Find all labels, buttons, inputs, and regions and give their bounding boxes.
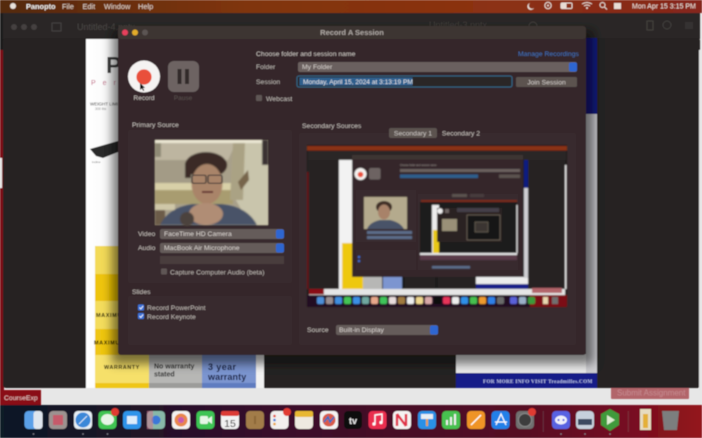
- record button: [128, 60, 160, 102]
- preview inner dialog: [352, 155, 523, 277]
- dialog shadow: [112, 30, 594, 364]
- primary source panel: FaceTime HD Camera: [164, 231, 232, 238]
- CourseExp tab: [0, 390, 41, 405]
- status icons: [527, 2, 621, 10]
- dock background: [0, 405, 702, 438]
- session form: [256, 51, 579, 103]
- right slide: blue and grey edge strip: [456, 38, 597, 374]
- slides panel: Slides: [132, 289, 151, 296]
- slide: yellow comparison table: 3 year: [208, 362, 237, 372]
- preview dock icons: [317, 297, 558, 304]
- slide: yellow comparison table: No warranty: [154, 364, 195, 370]
- background app window: toolbar: [3, 13, 700, 39]
- apple logo: [10, 3, 16, 9]
- slide: white page with heading: WEIGHT LIMIT: [90, 102, 121, 106]
- right dark side panel: [597, 38, 700, 388]
- menu bar: File: [62, 2, 74, 11]
- slide: yellow comparison table: MAXIMUM: [96, 313, 127, 319]
- primary source panel: MacBook Air Microphone: [164, 245, 240, 252]
- record button: Record: [134, 95, 155, 102]
- nested screen preview: Choose folder and session name: [400, 164, 437, 167]
- slide: yellow comparison table: [94, 246, 264, 388]
- dock icons: 15: [224, 418, 236, 430]
- CourseExp tab: CourseExp: [4, 395, 38, 402]
- session form: My Folder: [302, 64, 333, 71]
- background app window: dark canvas: [3, 38, 700, 388]
- primary source panel: Capture Computer Audio (beta): [170, 270, 264, 276]
- slide: yellow comparison table: warranty: [207, 372, 246, 382]
- left browser edge: [0, 13, 4, 390]
- menu bar: Help: [138, 2, 153, 11]
- slide: white page with heading: Perf: [91, 80, 132, 87]
- slides panel: Record Keynote: [147, 314, 196, 321]
- right slide footer: [456, 373, 597, 388]
- session form: Choose folder and session name: [256, 51, 356, 58]
- secondary sources panel: [299, 123, 576, 345]
- menu bar: Window: [104, 2, 131, 11]
- title bar: [118, 26, 586, 39]
- secondary sources panel: Secondary 2: [442, 130, 480, 138]
- menu bar: [0, 0, 702, 13]
- dialog: Record A Session: [118, 26, 586, 355]
- primary source panel: Audio: [138, 245, 156, 252]
- background dark slide panels: [264, 354, 456, 388]
- slide: white page with heading: incline: [92, 160, 101, 164]
- menu bar: Edit: [82, 2, 95, 11]
- title bar: Record A Session: [320, 28, 384, 37]
- pause button: [168, 61, 199, 102]
- slide: white page with heading: PRO: [106, 52, 156, 78]
- primary source panel: [128, 122, 292, 283]
- nested screen preview: [307, 145, 567, 307]
- camera feed: [155, 140, 268, 226]
- primary source panel: Primary Source: [132, 122, 179, 129]
- dock icons: [24, 408, 679, 435]
- slides panel: [128, 289, 292, 345]
- secondary sources panel: Secondary 1: [394, 130, 432, 138]
- primary source panel: Video: [138, 231, 155, 238]
- menu bar: Panopto: [26, 2, 56, 11]
- submit assignment button: [611, 387, 689, 399]
- slide: yellow comparison table: stated: [154, 372, 175, 378]
- secondary sources panel: Secondary Sources: [302, 123, 362, 130]
- secondary sources panel: Built-in Display: [339, 327, 385, 334]
- session form: Join Session: [527, 80, 566, 86]
- background app window: toolbar: Untitled-3.pptx: [429, 20, 488, 30]
- preview inner secondary panel: [418, 194, 518, 270]
- right slide footer: FOR MORE INFO VISIT Treadmilles.COM: [483, 379, 593, 385]
- secondary sources panel: Source: [307, 327, 329, 334]
- slide: white page with heading: [86, 39, 264, 388]
- slide: yellow comparison table: WARRANTY: [104, 365, 140, 371]
- slide: white page with heading: 300 lbs: [95, 107, 107, 111]
- submit assignment button: Submit Assignment: [617, 388, 686, 398]
- menu bar: Mon Apr 15 3:15 PM: [632, 4, 696, 10]
- session form: Webcast: [266, 96, 292, 103]
- session form: Manage Recordings: [518, 51, 579, 58]
- slides panel: Record PowerPoint: [147, 305, 206, 312]
- session form: Folder: [256, 64, 276, 71]
- slide: yellow comparison table: MAXIMUM: [94, 340, 125, 346]
- pause button: Pause: [174, 95, 193, 102]
- session form: Monday, April 15, 2024 at 3:13:19 PM: [303, 79, 413, 86]
- dock icons: tv: [349, 416, 357, 426]
- background app window: toolbar: Untitled-4.pptx: [77, 22, 136, 32]
- session form: Session: [256, 79, 280, 86]
